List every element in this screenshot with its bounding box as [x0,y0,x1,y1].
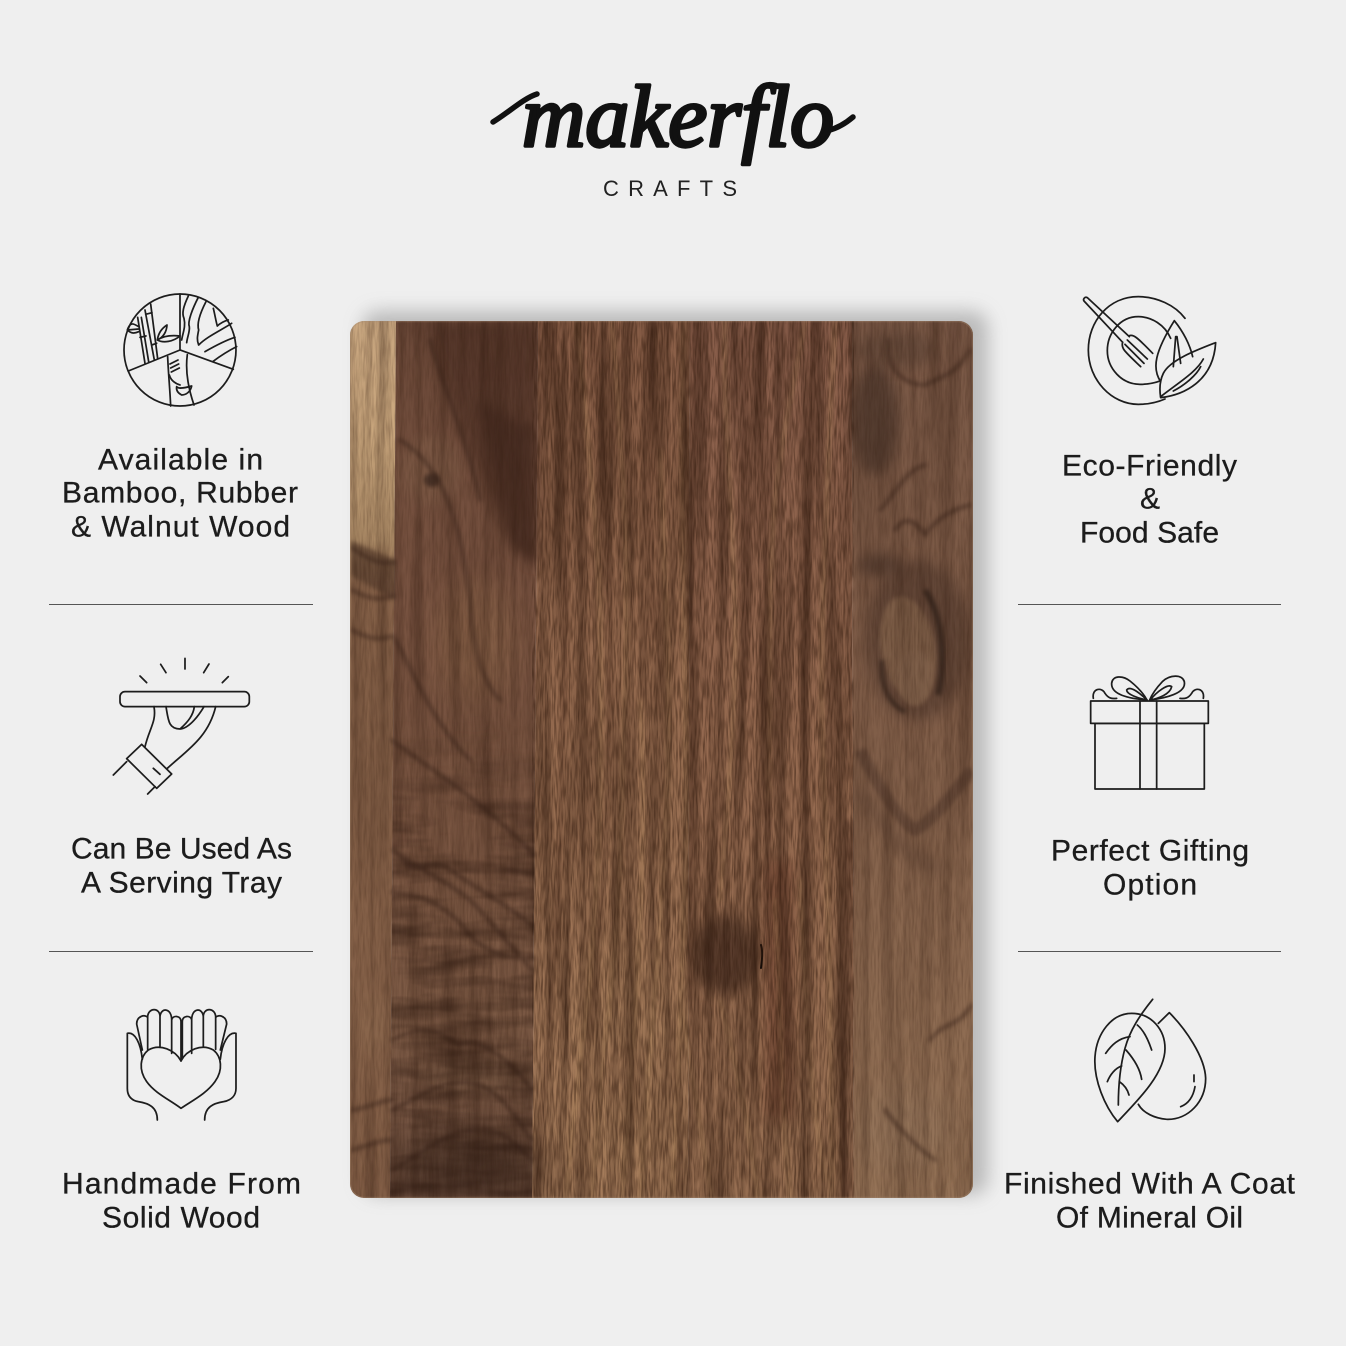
text: handmade [62,1168,301,1235]
text: handmade: Solid Wood [102,1202,260,1235]
text: eco friendly: & [1140,483,1160,516]
icon: bamboo rubber walnut wood circle [124,294,237,406]
board edge highlight [350,322,972,1198]
panel: left column features [49,294,313,1235]
wood grain lines [352,321,972,1198]
grain texture overlays [350,321,973,1200]
text: available in: Available in [98,444,263,477]
wood strip 5 [852,321,973,1198]
text: gifting [1051,835,1249,902]
wood strip 4 [688,321,854,1198]
wood strip 3 [532,321,690,1198]
text: mineral oil [1004,1168,1296,1235]
icon: plate fork and leaves [1084,297,1216,404]
text: available in: & Walnut Wood [71,511,290,544]
dark and light figure patches [350,321,972,1198]
text: serving tray: A Serving Tray [81,867,282,900]
icon: gift box [1091,676,1208,789]
icon: hand holding a serving tray [113,658,249,794]
logo wordmark: makerflo [522,69,834,166]
text: serving tray [71,833,292,900]
text: available in: Bamboo, Rubber [62,477,298,510]
walnut cutting board [350,321,973,1200]
text: handmade: Handmade From [62,1168,301,1201]
icon: hands holding a heart [127,1010,236,1120]
text: gifting: Perfect Gifting [1051,835,1249,868]
crack in the wood [761,945,762,968]
divider [1018,951,1281,952]
icon: leaf and oil drop [1095,999,1206,1122]
logo subtitle: CRAFTS [603,176,737,201]
text: eco friendly: Eco-Friendly [1062,450,1237,483]
divider [49,604,313,605]
divider [1018,604,1281,605]
text: eco friendly: Food Safe [1080,517,1219,550]
panel: right column features [1004,297,1296,1235]
logo: makerflo crafts [493,69,853,201]
text: gifting: Option [1103,869,1197,902]
text: mineral oil: Of Mineral Oil [1056,1202,1243,1235]
divider [49,951,313,952]
text: available in [62,444,298,544]
text: mineral oil: Finished With A Coat [1004,1168,1296,1201]
wood strip 2 [390,321,538,1198]
board shadow [362,311,988,1195]
text: eco friendly [1062,450,1237,550]
text: serving tray: Can Be Used As [71,833,292,866]
wood strip 1 [350,321,396,1198]
